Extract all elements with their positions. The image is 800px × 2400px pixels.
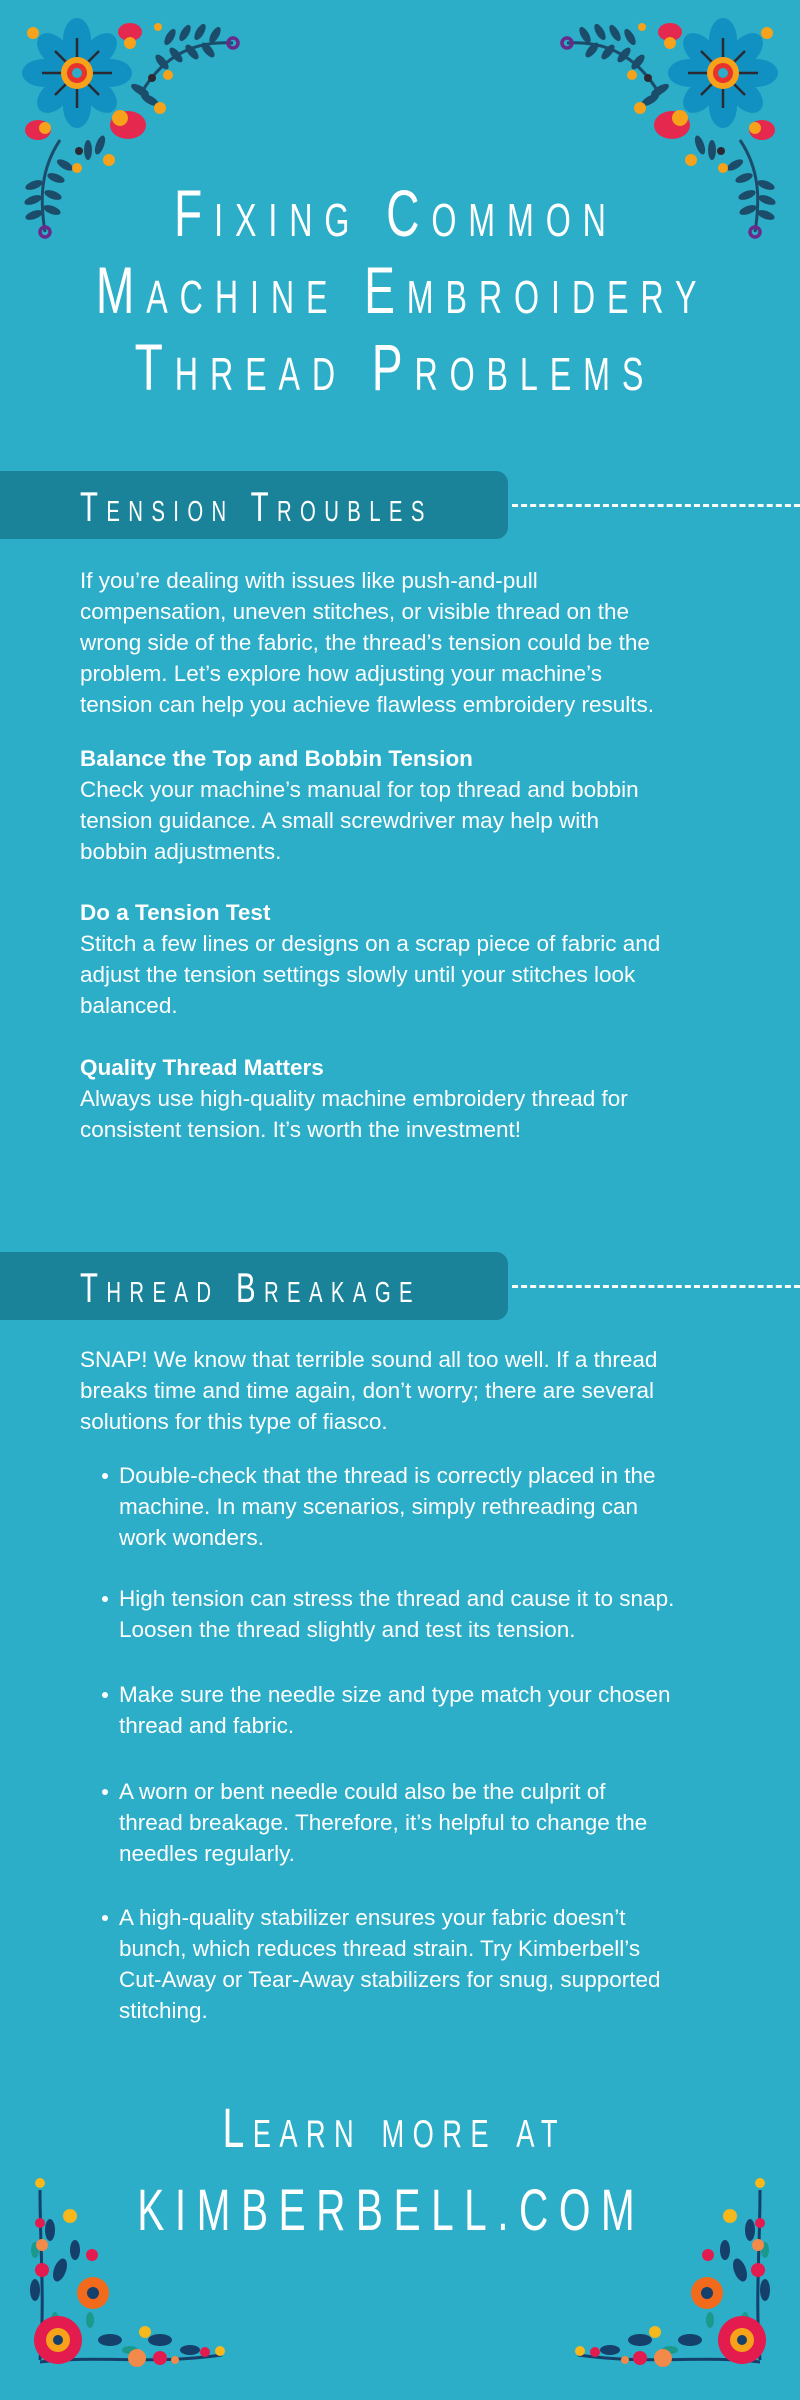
title: Thread Problems [135,330,655,404]
tip: balance tension: Balance the Top and Bobbin Tension [80,746,473,771]
bullet: stabilizer: stitching. [119,1998,208,2023]
tip: quality thread: Always use high-quality machine embroidery thread for [80,1086,628,1111]
section header: tension troubles: Tension Troubles [80,483,433,530]
bullet: needle size: thread and fabric. [119,1713,294,1738]
bullet: rethreading [119,1460,656,1553]
bullet list: breakage fixes [102,1463,674,2023]
text: tension intro: wrong side of the fabric, the thread’s tension could be the [80,630,650,655]
title: Fixing Common [174,176,618,250]
section header: tension troubles [0,471,800,539]
bullet: tension: Loosen the thread slightly and test its tension. [119,1617,576,1642]
footer call to action: KIMBERBELL.COM [137,2178,645,2243]
bullet: rethreading: machine. In many scenarios, simply rethreading can [119,1494,638,1519]
decoration: top-left flowers [22,18,240,239]
decoration: bottom-right flowers [575,2178,770,2367]
tip: tension test: balanced. [80,993,178,1018]
tip: quality thread: consistent tension. It’s worth the investment! [80,1117,521,1142]
tip: tension test: Stitch a few lines or designs on a scrap piece of fabric and [80,931,660,956]
text: tension intro: problem. Let’s explore how adjusting your machine’s [80,661,602,686]
bullet: stabilizer: A high-quality stabilizer ensures your fabric doesn’t [119,1905,626,1930]
text: breakage intro [80,1347,657,1434]
footer call to action: Learn more at [223,2096,566,2159]
bullet: needle size: Make sure the needle size and type match your chosen [119,1682,671,1707]
text: breakage intro: SNAP! We know that terrible sound all too well. If a thread [80,1347,657,1372]
decoration: top-right flowers [560,18,778,239]
title [96,176,708,404]
tip: balance tension [80,746,639,864]
bullet: worn needle: needles regularly. [119,1841,295,1866]
bullet: stabilizer [119,1902,661,2026]
tip: balance tension: tension guidance. A small screwdriver may help with [80,808,599,833]
section header: thread breakage: Thread Breakage [80,1264,421,1311]
tip: tension test: adjust the tension settings slowly until your stitches look [80,962,635,987]
decoration: bottom-left flowers [30,2178,225,2367]
text: tension intro: compensation, uneven stitches, or visible thread on the [80,599,629,624]
text: tension intro: tension can help you achieve flawless embroidery results. [80,692,654,717]
bullet: worn needle [119,1776,647,1869]
tip: tension test [80,900,660,1018]
bullet: tension: High tension can stress the thread and cause it to snap. [119,1586,674,1611]
bullet: worn needle: thread breakage. Therefore, it’s helpful to change the [119,1810,647,1835]
bullet: rethreading: work wonders. [119,1525,264,1550]
tip: quality thread [80,1055,628,1142]
text: breakage intro: breaks time and time again, don’t worry; there are several [80,1378,654,1403]
bullet: stabilizer: Cut-Away or Tear-Away stabilizers for snug, supported [119,1967,661,1992]
tip: tension test: Do a Tension Test [80,900,270,925]
footer call to action [137,2096,645,2243]
bullet: needle size [119,1679,671,1741]
text: tension intro [80,568,654,717]
tip: balance tension: Check your machine’s manual for top thread and bobbin [80,777,639,802]
tip: quality thread: Quality Thread Matters [80,1055,324,1080]
section header: thread breakage [0,1252,800,1320]
text: tension intro: If you’re dealing with issues like push-and-pull [80,568,538,593]
bullet: stabilizer: bunch, which reduces thread strain. Try Kimberbell’s [119,1936,640,1961]
bullet: rethreading: Double-check that the thread is correctly placed in the [119,1463,656,1488]
tip: balance tension: bobbin adjustments. [80,839,281,864]
title: Machine Embroidery [96,253,708,327]
bullet: tension [119,1583,674,1645]
text: breakage intro: solutions for this type of fiasco. [80,1409,388,1434]
bullet: worn needle: A worn or bent needle could also be the culprit of [119,1779,606,1804]
